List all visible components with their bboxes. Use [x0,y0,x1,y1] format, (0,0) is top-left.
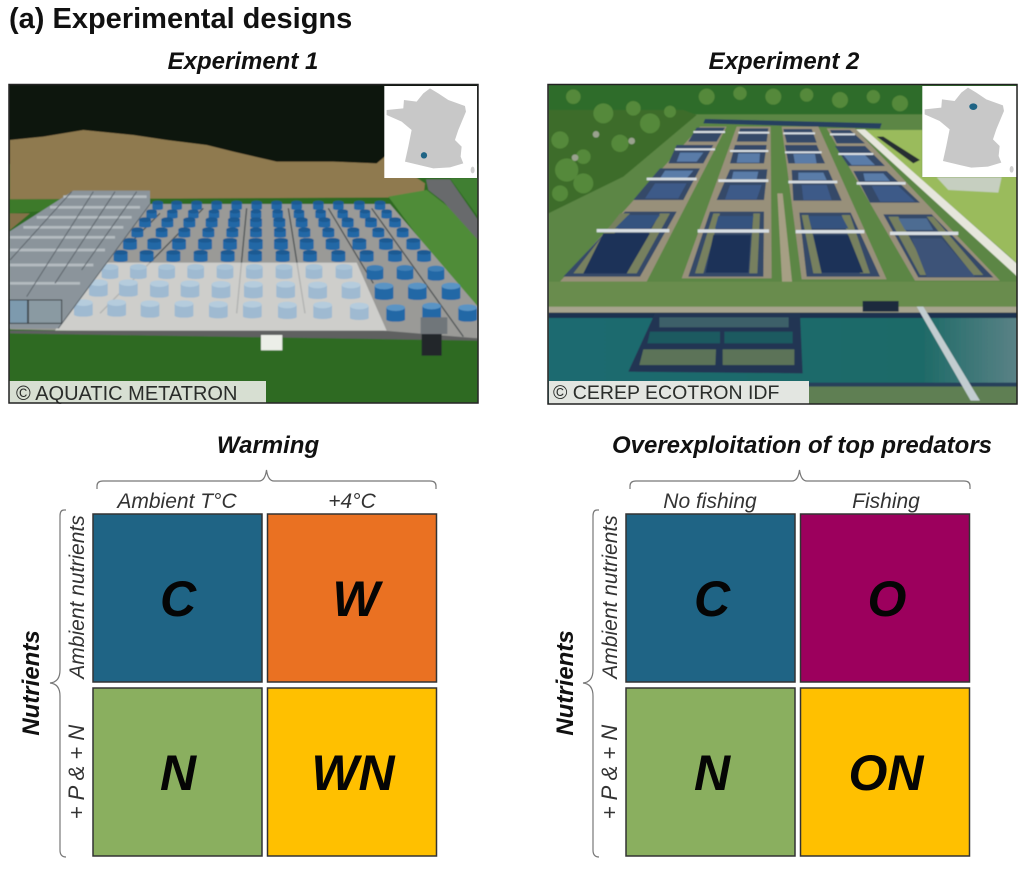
brace: warming levels [97,470,436,489]
central path [777,193,793,293]
title: (a) Experimental designs [9,3,352,35]
brace: nutrient levels [50,510,66,857]
pond banks [560,127,1000,282]
cell C [626,514,795,682]
cell C: C [694,571,731,627]
panel: overexploitation design matrix [552,432,992,857]
tank rows [74,201,477,322]
cell WN: WN [311,745,396,801]
heading: Overexploitation of top predators: Overexploitation of top predators [612,432,992,459]
heading: Experiment 2: Experiment 2 [709,48,860,75]
label: Nutrients: Nutrients [552,630,579,736]
cell N: N [694,745,731,801]
cell ON: ON [848,745,924,801]
cell O [800,514,970,682]
brace: nutrient levels [583,510,599,857]
label: Ambient nutrients: Ambient nutrients [66,515,89,681]
cell N: N [160,745,197,801]
label: No fishing: No fishing [663,490,757,513]
floating structure [628,313,803,373]
cell C: C [160,571,197,627]
cell ON [800,688,970,856]
pond water [583,233,863,273]
cell O: O [868,571,907,627]
label: + P & + N: + P & + N [597,725,622,819]
inset map: France with site marker [922,86,1017,177]
inner green reed strips [573,213,983,275]
label: + P & + N: + P & + N [64,725,89,819]
white bridges [597,131,958,235]
pond frames [563,128,993,277]
photo credit: CEREP Ecotron: © CEREP ECOTRON IDF [553,382,779,404]
label: Ambient T°C: Ambient T°C [115,490,237,513]
cell N [93,688,262,856]
label: Nutrients: Nutrients [18,630,45,736]
label: Fishing: Fishing [852,490,920,513]
cell C [93,514,262,682]
photo credit: Aquatic Metatron: © AQUATIC METATRON [16,383,237,405]
panel: warming design matrix [18,432,436,857]
mesocosm cages [9,191,150,328]
heading: Warming: Warming [217,432,319,459]
label: Ambient nutrients: Ambient nutrients [599,515,622,681]
translucent overlay [55,263,387,331]
brace: fishing levels [630,470,970,489]
panel: photo of the CEREP Ecotron [548,84,1018,405]
heading: Experiment 1: Experiment 1 [168,48,318,75]
cell W: W [332,571,383,627]
panel: photo of the Aquatic Metatron [9,84,478,405]
instrument cabin [421,317,447,356]
cell WN [268,688,436,856]
inset map: France with site marker [384,86,477,178]
label: +4°C: +4°C [328,490,377,513]
cell N [626,688,795,856]
cell W [268,514,436,682]
